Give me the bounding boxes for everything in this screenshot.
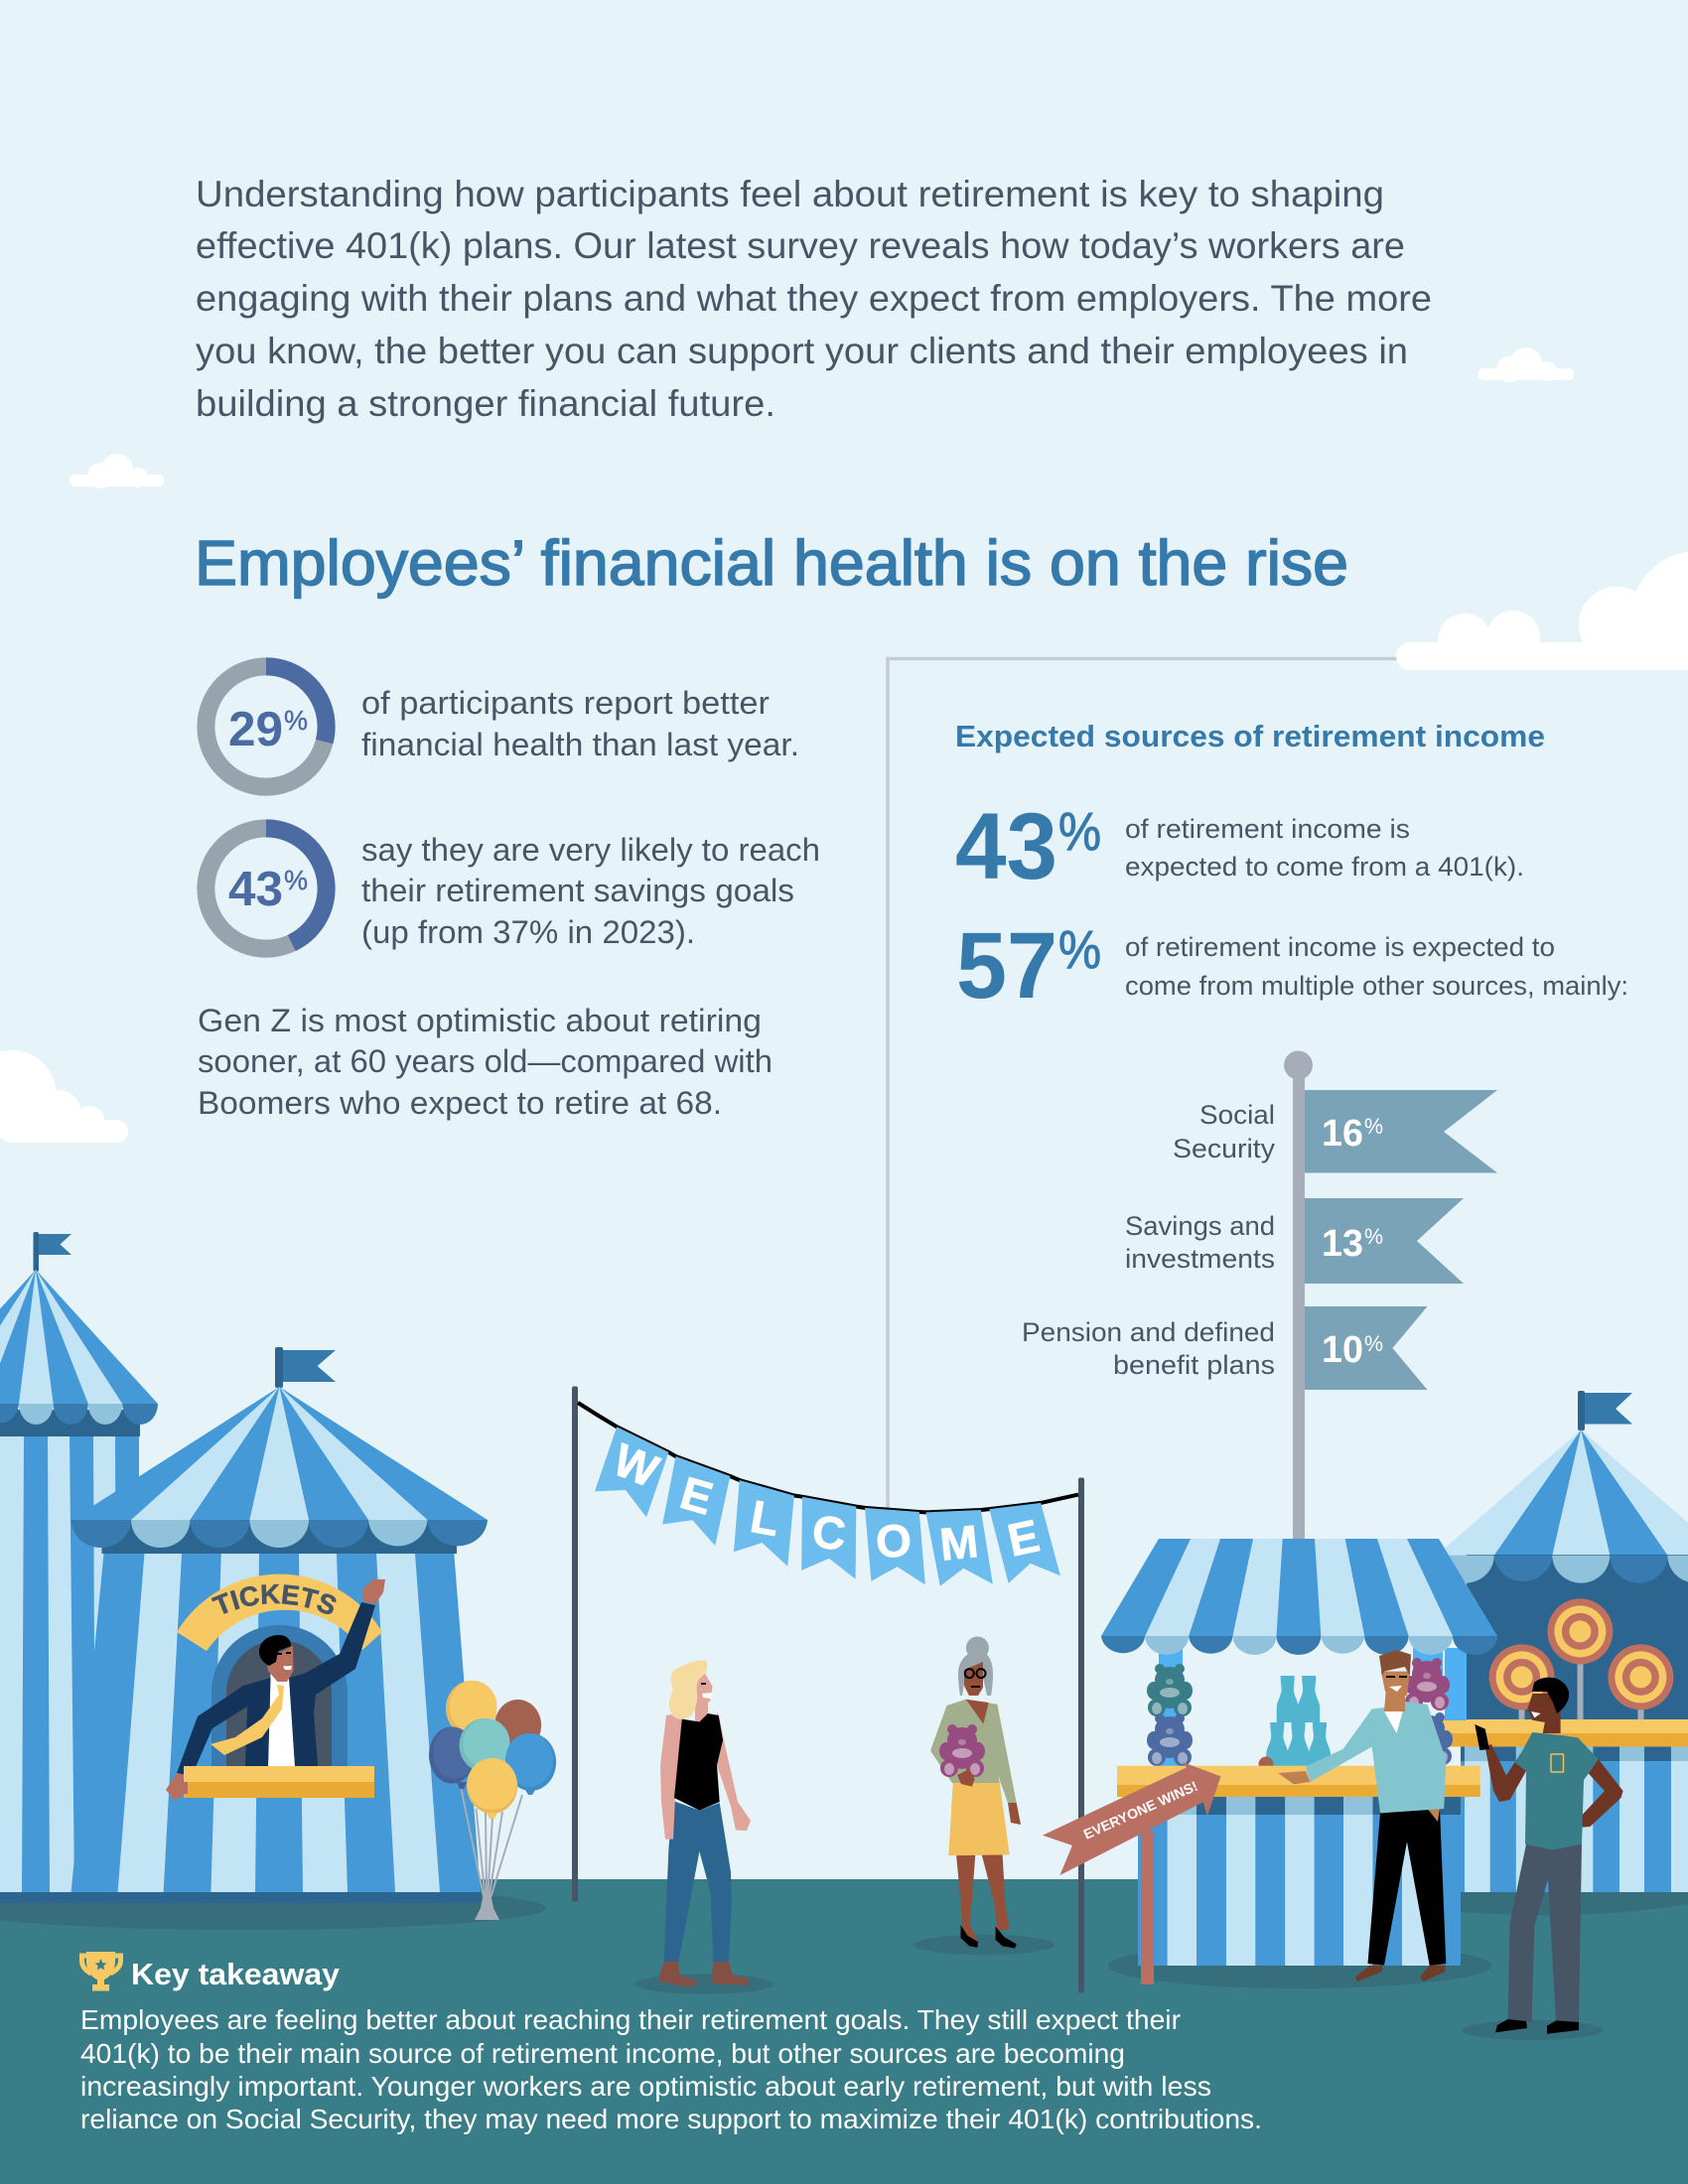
key takeaway body: reliance on Social Security, they may need more support to maximize their 401(k) contributions. <box>80 2104 1262 2134</box>
carnival targets <box>1489 1598 1673 1721</box>
tent flag <box>275 1347 336 1388</box>
teddy bear prizes <box>1147 1658 1453 1766</box>
woman in black top <box>635 1660 774 1994</box>
Gen Z text: sooner, at 60 years old—compared with <box>198 1043 773 1079</box>
pennant L: L <box>747 1490 783 1546</box>
key takeaway body <box>80 2004 1262 2134</box>
stat text: 29 percent: of participants report better <box>361 685 770 721</box>
pennant E <box>989 1503 1060 1583</box>
intro paragraph: building a stronger financial future. <box>196 383 775 424</box>
ticket seller <box>166 1579 385 1801</box>
pennant O: O <box>875 1514 913 1568</box>
Gen Z text: Gen Z is most optimistic about retiring <box>198 1003 762 1038</box>
key takeaway body: increasingly important. Younger workers are optimistic about early retirement, but with less <box>80 2071 1211 2102</box>
pennant M <box>925 1510 993 1586</box>
flag: Social Security 16 percent: Social <box>1199 1100 1275 1130</box>
pennant W: W <box>607 1433 666 1497</box>
pennant E: E <box>1003 1509 1044 1567</box>
stat: 43 percent from 401k: expected to come from a 401(k). <box>1125 852 1524 882</box>
stat text: 29 percent: financial health than last year. <box>361 727 799 762</box>
ticket counter <box>184 1766 374 1798</box>
intro paragraph: you know, the better you can support your clients and their employees in <box>196 331 1408 371</box>
flag: Social Security 16 percent: Security <box>1173 1134 1276 1163</box>
flag: Social Security 16 percent <box>1173 1090 1497 1173</box>
flag: Savings and investments 13 percent: investments <box>1125 1244 1275 1274</box>
stat: 43 percent ring: % <box>284 865 308 895</box>
prize stall <box>1043 1539 1497 1988</box>
shadow: ticket tent <box>0 1886 546 1930</box>
pennant M: M <box>937 1515 981 1570</box>
banner poles <box>572 1386 1084 1993</box>
key takeaway body: Employees are feeling better about reaching their retirement goals. They still expect their <box>80 2004 1181 2035</box>
intro paragraph: engaging with their plans and what they expect from employers. The more <box>196 278 1432 319</box>
stat: 29 percent ring: % <box>284 705 308 736</box>
game stall back tent <box>1437 1391 1688 1915</box>
back counter <box>1440 1719 1688 1892</box>
flag: Pension and defined benefit plans 10 percent: % <box>1364 1331 1383 1356</box>
pennant E <box>662 1456 730 1546</box>
stat: 43 percent ring <box>206 828 327 949</box>
flag: Pension and defined benefit plans 10 percent: benefit plans <box>1113 1350 1275 1380</box>
stat: 57 percent other sources: come from multiple other sources, mainly: <box>1125 971 1628 1001</box>
back tent roof <box>1437 1430 1688 1723</box>
flag: Pension and defined benefit plans 10 percent: 10 <box>1322 1329 1363 1371</box>
flag: Savings and investments 13 percent: 13 <box>1322 1223 1363 1265</box>
Gen Z text: Boomers who expect to retire at 68. <box>198 1085 722 1121</box>
stat: 57 percent other sources: of retirement income is expected to <box>1125 932 1555 962</box>
stat: 43 percent from 401k <box>955 794 1524 899</box>
stall shadow <box>1108 1943 1491 1988</box>
key takeaway <box>80 1952 1262 2134</box>
stat: 57 percent other sources <box>956 913 1628 1019</box>
intro paragraph: effective 401(k) plans. Our latest survey reveals how today’s workers are <box>196 225 1405 266</box>
stat: 43 percent ring: 43 <box>228 863 283 916</box>
flag: Savings and investments 13 percent: Savings and <box>1125 1211 1275 1241</box>
stat text: 43 percent <box>361 832 820 950</box>
banner string <box>578 1403 1078 1512</box>
cloud: right of intro <box>1478 347 1574 382</box>
stat: 57 percent other sources: % <box>1058 920 1101 980</box>
cloud: large left <box>0 1050 128 1143</box>
heading: Employees’ financial health is on the rise <box>195 527 1348 599</box>
balloons <box>429 1681 556 1920</box>
stat text: 43 percent: say they are very likely to reach <box>361 832 820 868</box>
stat: 43 percent from 401k: 43 <box>955 794 1057 899</box>
flag: Pension and defined benefit plans 10 percent: Pension and defined <box>1022 1317 1275 1347</box>
stall posts <box>1159 1648 1467 1767</box>
stat: 29 percent ring: 29 <box>228 703 283 756</box>
stall counter <box>1117 1766 1480 1966</box>
ball <box>1259 1757 1273 1771</box>
panel: expected sources frame <box>888 659 1400 1519</box>
everyone wins sign: EVERYONE WINS! <box>1081 1778 1199 1843</box>
woman with teddy bear <box>914 1636 1055 1955</box>
stat text: 43 percent: their retirement savings goals <box>361 873 794 908</box>
man with phone <box>1462 1678 1623 2040</box>
intro paragraph <box>196 174 1432 424</box>
pennant O <box>865 1508 925 1584</box>
back left tent <box>0 1232 158 1892</box>
pennant C: C <box>810 1505 848 1560</box>
cloud: left of heading <box>70 454 164 488</box>
stat: 57 percent other sources: 57 <box>956 913 1057 1019</box>
pennant L <box>734 1480 794 1567</box>
welcome banner <box>572 1386 1084 1993</box>
tent body stripes <box>0 1554 481 1903</box>
panel heading: Expected sources of retirement income <box>955 719 1545 753</box>
stat text: 43 percent: (up from 37% in 2023). <box>361 914 695 950</box>
flag: Savings and investments 13 percent: % <box>1364 1224 1383 1249</box>
flag: Social Security 16 percent: 16 <box>1322 1113 1363 1155</box>
stat text: 29 percent <box>361 685 799 762</box>
everyone wins sign <box>1043 1762 1221 1984</box>
cloud: top right over frame <box>1396 552 1688 670</box>
pennant W <box>595 1427 669 1517</box>
ticket tent <box>0 1347 488 1903</box>
tent roof <box>71 1387 488 1554</box>
key takeaway heading: Key takeaway <box>131 1957 341 1991</box>
key takeaway body: 401(k) to be their main source of retirement income, but other sources are becoming <box>80 2038 1125 2069</box>
Gen Z text <box>198 1003 773 1121</box>
flag: Savings and investments 13 percent <box>1125 1198 1464 1284</box>
flagpole chart <box>1022 1050 1497 1542</box>
stat: 43 percent from 401k: of retirement income is <box>1125 814 1410 844</box>
tickets sign: TICKETS <box>211 1584 336 1614</box>
back tent shadow <box>1461 1892 1688 1915</box>
awning <box>1101 1539 1497 1655</box>
flag: Social Security 16 percent: % <box>1364 1114 1383 1139</box>
pennant C <box>801 1497 856 1579</box>
intro paragraph: Understanding how participants feel about retirement is key to shaping <box>196 174 1384 214</box>
man at prize stall <box>1278 1650 1446 1981</box>
stat: 43 percent from 401k: % <box>1058 802 1101 862</box>
flag: Pension and defined benefit plans 10 percent <box>1022 1306 1428 1390</box>
tickets sign <box>177 1574 382 1651</box>
back tent flag <box>1578 1391 1632 1431</box>
icon: trophy <box>81 1952 121 1991</box>
ticket window arch <box>211 1625 348 1766</box>
pennant E: E <box>675 1466 719 1525</box>
stat: 29 percent ring <box>206 666 327 787</box>
bottle pyramid <box>1266 1676 1331 1769</box>
ground <box>0 1879 1688 2184</box>
